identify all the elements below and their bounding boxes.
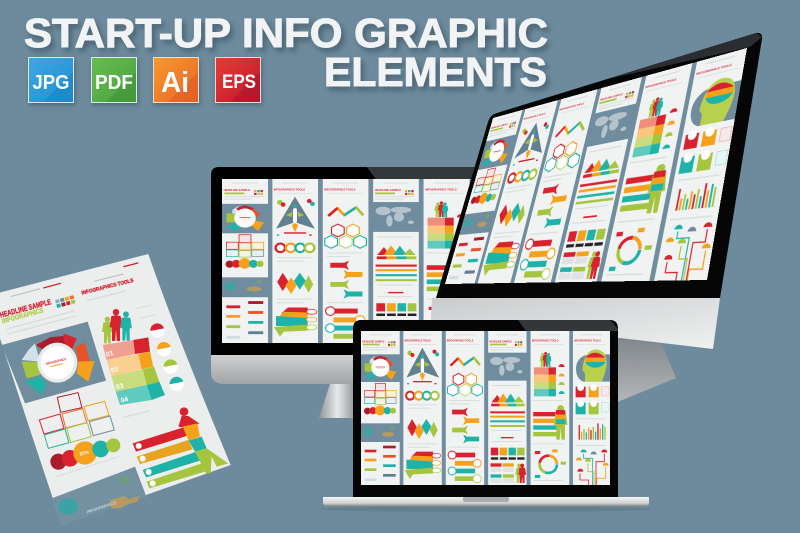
poster half circles bbox=[150, 323, 184, 391]
title: ELEMENTS bbox=[324, 49, 547, 95]
monitor chin bbox=[211, 352, 400, 384]
title: START-UP INFO GRAPHIC bbox=[24, 10, 548, 56]
small monitor bbox=[211, 167, 530, 418]
monitor screen bbox=[222, 179, 470, 343]
icon: JPG: JPG bbox=[32, 72, 70, 94]
poster map blobs: INFOGRAPHICS bbox=[86, 500, 117, 514]
poster ribbons bbox=[133, 427, 205, 488]
icon: JPG bbox=[28, 58, 74, 102]
monitor bezel bbox=[211, 167, 530, 355]
poster headline: INFOGRAPHICS TOOLS bbox=[81, 278, 135, 297]
laptop screen bbox=[361, 331, 610, 485]
icon: PDF bbox=[92, 58, 136, 102]
icon: EPS bbox=[216, 58, 260, 102]
laptop base bbox=[323, 497, 649, 507]
poster stack chart: 02 bbox=[110, 366, 120, 375]
poster table cards bbox=[39, 393, 114, 448]
large monitor body bbox=[430, 33, 762, 405]
poster silhouettes bbox=[102, 309, 132, 343]
laptop bezel bbox=[353, 320, 618, 497]
poster stack chart bbox=[103, 337, 165, 405]
poster accent strips bbox=[11, 283, 61, 297]
poster caption lines bbox=[7, 290, 155, 478]
poster stack chart: 03 bbox=[115, 383, 125, 391]
monitor stand bbox=[319, 384, 356, 418]
large monitor bezel bbox=[436, 33, 762, 298]
poster headline bbox=[0, 278, 135, 325]
bezel glare bbox=[367, 167, 530, 179]
large monitor screen bbox=[445, 48, 747, 284]
icon: EPS: EPS bbox=[222, 72, 256, 93]
poster stack chart: 04 bbox=[120, 396, 129, 405]
laptop glare bbox=[518, 320, 618, 331]
poster map blobs bbox=[58, 476, 139, 515]
laptop bbox=[321, 320, 651, 512]
poster wheel: INFOGRAPHICS bbox=[46, 357, 67, 366]
icon: Ai: Ai bbox=[161, 67, 189, 99]
poster bbox=[0, 254, 231, 525]
poster lower panel bbox=[52, 467, 147, 525]
bezel glare bbox=[608, 33, 762, 79]
poster person bbox=[178, 407, 228, 473]
poster circles bbox=[50, 438, 120, 470]
poster stack chart: 01 bbox=[105, 350, 115, 359]
large monitor stand bbox=[610, 336, 676, 405]
icon: PDF: PDF bbox=[95, 72, 133, 94]
poster wheel panel bbox=[2, 322, 106, 403]
poster circles: 25% bbox=[79, 449, 90, 457]
large monitor chin bbox=[430, 298, 720, 349]
title bbox=[24, 10, 548, 95]
poster headline: INFOGRAPHICS bbox=[1, 307, 45, 325]
icon: Ai bbox=[154, 58, 198, 102]
poster headline: HEADLINE SAMPLE bbox=[0, 297, 52, 320]
poster sheet bbox=[0, 254, 231, 525]
poster wheel bbox=[22, 333, 95, 395]
laptop notch bbox=[463, 497, 509, 502]
poster colour swatches bbox=[55, 295, 76, 308]
laptop shadow bbox=[321, 506, 651, 512]
